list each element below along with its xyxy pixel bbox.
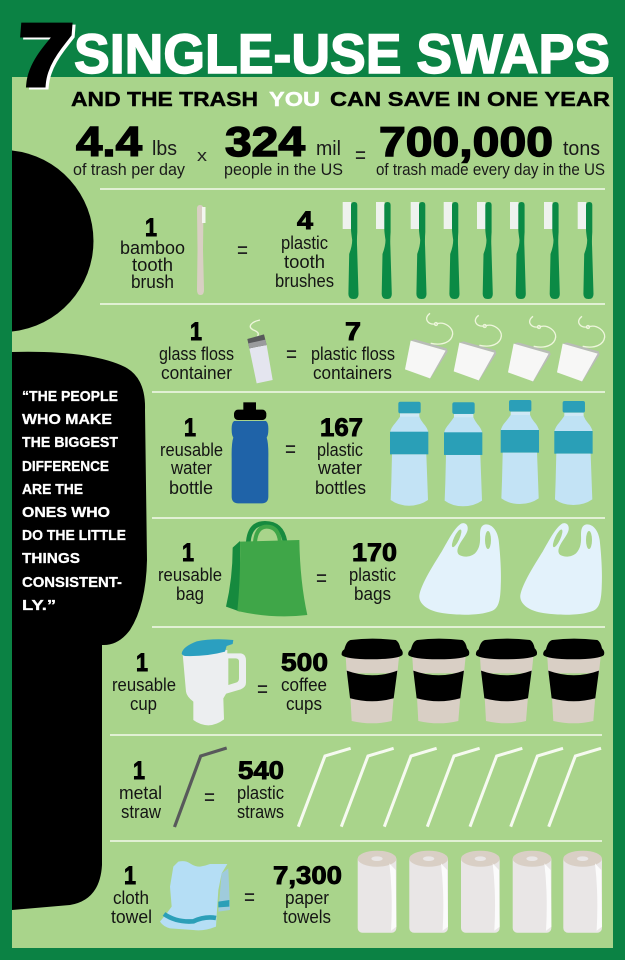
row: toothbrush text: tooth xyxy=(132,255,173,275)
row: floss text: glass floss xyxy=(159,344,234,364)
row: towel text: paper xyxy=(285,888,329,908)
title: SINGLE-USE SWAPS xyxy=(74,22,610,85)
row: water bottle text: = xyxy=(285,436,296,463)
row: towel text: towels xyxy=(283,907,331,927)
quote xyxy=(22,388,126,614)
quote: ARE THE xyxy=(22,481,83,498)
row: bag text: 170 xyxy=(352,539,397,567)
stat equation: people in the US xyxy=(224,160,343,179)
icon: reusable travel mug xyxy=(182,639,246,725)
row: cup text: = xyxy=(257,676,268,703)
stat equation xyxy=(73,118,605,179)
icon: reusable water bottle xyxy=(232,402,268,503)
row: toothbrush text: plastic xyxy=(281,233,328,253)
row: floss text: 7 xyxy=(345,318,361,346)
icon: reusable bag xyxy=(226,523,307,616)
row: cup text: 500 xyxy=(281,649,328,677)
row: floss text xyxy=(159,318,395,383)
row: floss text: container xyxy=(161,363,232,383)
stat equation: tons xyxy=(563,138,600,160)
row: towel text: = xyxy=(244,884,255,911)
row: toothbrush text: brushes xyxy=(275,271,334,291)
row: water bottle text: water xyxy=(317,458,362,478)
icon: cloth towel xyxy=(160,861,230,930)
quote: DO THE LITTLE xyxy=(22,527,126,544)
icons: paper towels xyxy=(358,851,602,933)
stat equation: 700,000 xyxy=(379,118,553,165)
row: bag text: 1 xyxy=(182,539,194,567)
title numeral 7: 7 xyxy=(14,6,75,104)
stat equation: = xyxy=(355,142,366,169)
row: cup text: reusable xyxy=(112,675,176,695)
quote: “THE PEOPLE xyxy=(22,388,118,405)
row: straw text: plastic xyxy=(237,783,284,803)
stat equation: mil xyxy=(316,138,341,160)
row: towel text: 1 xyxy=(124,862,136,890)
stat equation: x xyxy=(197,146,208,165)
row: towel text: towel xyxy=(111,907,152,927)
stat equation: of trash per day xyxy=(73,160,185,179)
row: toothbrush text: tooth xyxy=(284,252,325,272)
quote: WHO MAKE xyxy=(22,411,112,428)
icon: bamboo toothbrush xyxy=(197,205,206,295)
subtitle: AND THE TRASH xyxy=(71,89,258,111)
row: bag text xyxy=(158,539,397,604)
row: toothbrush text xyxy=(120,207,334,292)
row: straw text: straw xyxy=(121,802,162,822)
stat equation: lbs xyxy=(152,138,177,160)
row: towel text xyxy=(111,862,342,927)
row: water bottle text: 167 xyxy=(320,414,363,442)
quote: THINGS xyxy=(22,550,80,567)
row: straw text: metal xyxy=(119,783,162,803)
row: bag text: plastic xyxy=(349,565,396,585)
icons: plastic bags xyxy=(419,523,602,615)
quote: LY.” xyxy=(22,597,56,614)
row: water bottle text: 1 xyxy=(184,414,196,442)
row: bag text: bag xyxy=(176,584,204,604)
icons: coffee cups xyxy=(342,639,604,723)
row: straw text: = xyxy=(204,784,215,811)
quote: THE BIGGEST xyxy=(22,434,118,451)
row: cup text: cup xyxy=(130,694,157,714)
silhouette body xyxy=(12,352,147,910)
row: straw text: straws xyxy=(237,802,284,822)
silhouette head xyxy=(12,150,93,332)
row: water bottle text: bottle xyxy=(169,478,213,498)
row: water bottle text: water xyxy=(170,458,212,478)
row: bag text: reusable xyxy=(158,565,222,585)
row: toothbrush text: bamboo xyxy=(120,238,185,258)
row: water bottle text: reusable xyxy=(160,440,223,460)
row: towel text: cloth xyxy=(113,888,149,908)
icons: plastic toothbrushes xyxy=(343,202,594,299)
subtitle: CAN SAVE IN ONE YEAR xyxy=(330,89,611,111)
row: toothbrush text: brush xyxy=(131,272,174,292)
quote: ONES WHO xyxy=(22,504,110,521)
row: towel text: 7,300 xyxy=(273,862,342,890)
row: bag text: = xyxy=(316,565,327,592)
quote: CONSISTENT- xyxy=(22,574,122,591)
row: toothbrush text: = xyxy=(237,237,248,264)
icon: glass floss container xyxy=(247,320,273,383)
row: cup text: cups xyxy=(286,694,322,714)
stat equation: 4.4 xyxy=(76,118,143,165)
row: floss text: plastic floss xyxy=(311,344,395,364)
row: cup text xyxy=(112,649,328,714)
icons: plastic straws xyxy=(298,748,601,827)
row: straw text xyxy=(119,757,284,822)
row: water bottle text xyxy=(160,414,366,498)
icons: plastic floss containers xyxy=(405,313,605,382)
row: water bottle text: bottles xyxy=(315,478,366,498)
row: cup text: coffee xyxy=(281,675,327,695)
subtitle: YOU xyxy=(269,89,320,111)
row: floss text: 1 xyxy=(190,318,202,346)
row: toothbrush text: 4 xyxy=(297,207,313,235)
subtitle xyxy=(71,89,611,111)
row: floss text: = xyxy=(286,341,297,368)
title numeral 7: 7 xyxy=(17,8,78,106)
icon: metal straw xyxy=(174,748,227,827)
row: toothbrush text: 1 xyxy=(145,214,157,242)
row: floss text: containers xyxy=(313,363,392,383)
row: straw text: 540 xyxy=(238,757,284,785)
row: water bottle text: plastic xyxy=(317,440,363,460)
stat equation: 324 xyxy=(225,118,306,165)
quote: DIFFERENCE xyxy=(22,458,109,475)
row: bag text: bags xyxy=(354,584,391,604)
icons: plastic water bottles xyxy=(390,400,593,506)
row: straw text: 1 xyxy=(133,757,145,785)
row: cup text: 1 xyxy=(136,649,148,677)
